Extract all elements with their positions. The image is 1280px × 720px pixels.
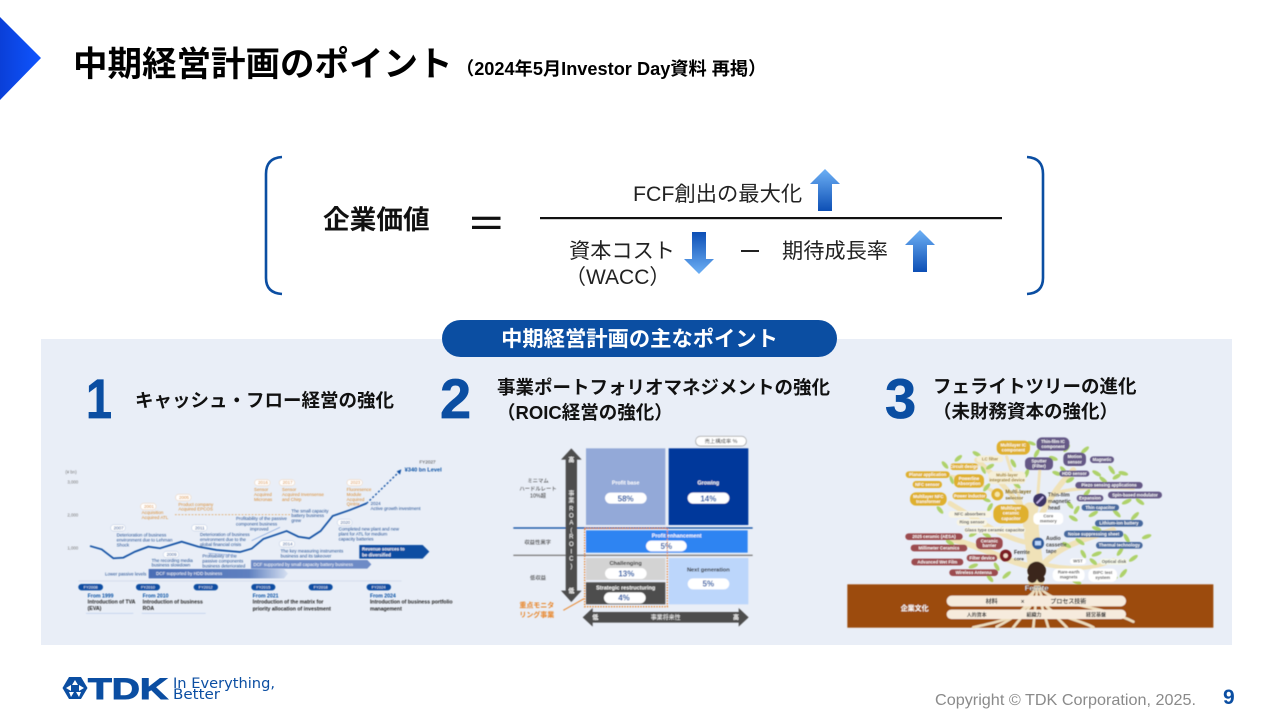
red technology pills: 2025 ceramic (AESA) — [912, 534, 956, 539]
soil band: corporate culture: 人的資本 — [967, 611, 987, 618]
purple technology pills: sensor — [1068, 459, 1082, 464]
management milestones: ROA — [143, 606, 154, 612]
management milestones: priority allocation of investment — [253, 606, 331, 612]
node: ferrite core: core — [1014, 557, 1024, 562]
point 3 heading — [885, 367, 1137, 430]
tree trunk and branches — [940, 457, 1133, 587]
panel: key points background — [41, 339, 1232, 645]
cell: Strategic restructuring — [586, 582, 665, 604]
management milestones: Introduction of business — [143, 600, 203, 606]
soil band: corporate culture: 経営基盤 — [1086, 611, 1106, 618]
blue event notes: 2014 — [283, 541, 293, 546]
subtitle: （2024年5月Investor Day資料 再掲） — [456, 58, 766, 79]
legend pill — [696, 436, 746, 446]
vertical ROA axis arrow: 高 — [568, 456, 574, 464]
orange acquisition notes: Acquired EPCOS — [178, 507, 213, 512]
point 2 heading — [440, 367, 831, 430]
node: audio cassette tape: tape — [1046, 549, 1057, 555]
management milestones: Introduction of business portfolio — [370, 600, 452, 606]
vertical ROA axis arrow: C — [569, 557, 574, 563]
revenue line — [90, 503, 367, 558]
cream technology pills: Core — [1043, 513, 1054, 518]
orange acquisition notes: Acquisition — [142, 510, 164, 515]
blue event notes: Deterioration of business — [117, 533, 167, 538]
focus monitoring label: 重点モニタ — [519, 601, 554, 610]
page number: 9 — [1223, 686, 1235, 709]
vertical ROA axis arrow: A — [569, 521, 573, 527]
orange acquisition notes: 2017 — [283, 480, 293, 485]
yellow technology pills: transformer — [916, 499, 941, 504]
point 3 heading: フェライトツリーの進化 — [933, 376, 1137, 397]
orange acquisition notes: Acquired — [347, 497, 365, 502]
vertical ROA axis arrow: O — [569, 542, 574, 548]
cell: Growing: Growing — [698, 481, 719, 487]
TDK logo — [62, 673, 275, 706]
minus sign — [741, 250, 759, 252]
blue event notes: Lower passive levels — [105, 572, 147, 577]
vertical ROA axis arrow: 業 — [568, 497, 574, 505]
axis labels — [65, 470, 79, 551]
management milestones: (EVA) — [88, 606, 102, 612]
CCC arrow: HDD: DCF supported by HDD business — [156, 571, 223, 576]
cell: Profit base: 58% — [618, 494, 634, 503]
fiscal year pills: FY2024 — [372, 585, 386, 590]
blue technology pills: Thermal technology — [1099, 543, 1140, 548]
node: thin-film magnetic head: magnetic — [1048, 499, 1071, 505]
row labels: 低収益 — [530, 574, 547, 582]
CCC arrow: rechargeable — [251, 560, 371, 569]
horizontal future axis arrow: 低 — [592, 614, 598, 622]
cream technology pills: memory — [1040, 518, 1057, 523]
blue event notes: Profitability of the — [202, 554, 237, 559]
leaves — [935, 440, 1152, 586]
row labels: 10%超 — [530, 492, 547, 500]
row labels: ハードルレート — [519, 486, 557, 492]
logo tagline: Better — [173, 687, 220, 703]
node: ferrite core — [1000, 550, 1030, 562]
blue event notes: 2011 — [195, 525, 205, 530]
purple technology pills: component — [1041, 444, 1065, 449]
numerator text: FCF創出の最大化 — [633, 182, 802, 206]
soil band: corporate culture — [847, 584, 1213, 628]
red technology pills: barrier — [982, 543, 997, 548]
focus monitoring label — [519, 599, 584, 619]
horizontal future axis arrow — [583, 608, 749, 627]
cream technology pills: Glass type ceramic capacitor — [965, 528, 1025, 533]
orange acquisition notes: Fluoresence — [347, 487, 372, 492]
red technology pills — [905, 533, 1003, 576]
yellow technology pills: capacitor — [1001, 516, 1021, 521]
management milestones: From 1999 — [88, 593, 114, 599]
red technology pills: Ceramic — [981, 538, 998, 543]
orange acquisition notes: and Chirp — [282, 497, 302, 502]
orange acquisition notes: 2023 — [350, 480, 361, 485]
vertical ROA axis arrow: O — [569, 513, 574, 519]
soil band: corporate culture: Ferrite — [1025, 584, 1049, 593]
key points heading pill: 中期経営計画の主なポイント — [501, 327, 778, 351]
horizontal future axis arrow: 高 — [733, 614, 739, 622]
logo tagline: In Everything, — [173, 676, 275, 692]
arrow down: WACC — [684, 232, 714, 274]
fraction line — [540, 217, 1002, 219]
roots — [957, 587, 1133, 627]
purple technology pills: Thin-film IC — [1041, 439, 1065, 444]
blue event notes: global financial crisis — [200, 542, 242, 547]
corner triangle marker — [0, 17, 41, 100]
legend pill: 売上構成率 % — [705, 437, 738, 445]
cell: Growing — [669, 448, 748, 525]
blue event notes: Profitability of the passive — [236, 516, 287, 521]
soil band: corporate culture: × — [1021, 599, 1025, 605]
purple technology pills: HDD sensor — [1062, 471, 1087, 476]
focus monitoring label: リング事業 — [519, 610, 554, 619]
fiscal year pills — [78, 584, 391, 590]
red technology pills: Millimeter Ceramics — [919, 545, 960, 550]
right bracket — [1027, 157, 1043, 294]
cell: Challenging: Challenging — [609, 561, 642, 567]
cell: Strategic restructuring: Strategic restructuring — [596, 585, 655, 591]
node: thin-film magnetic head: Thin-film — [1048, 493, 1070, 499]
blue event notes: 2007 — [114, 525, 124, 530]
management milestones: Introduction of the matrix for — [253, 600, 323, 606]
cream technology pills — [948, 511, 1128, 582]
yellow technology pills: NFC sensor — [915, 482, 940, 487]
yellow technology pills: Powerline — [959, 476, 980, 481]
formula panel — [266, 157, 1043, 294]
logo tagline — [173, 676, 275, 703]
vertical ROA axis arrow: 事 — [568, 489, 574, 497]
axis labels: 2,000 — [67, 513, 79, 518]
blue event notes: The small capacity — [291, 508, 329, 513]
point 2 heading: 2 — [440, 367, 471, 430]
blue technology pills: Noise suppressing sheet — [1068, 531, 1120, 536]
point 1 heading: 1 — [86, 367, 112, 430]
orange acquisition notes: 2016 — [258, 480, 268, 485]
dotted forecast — [367, 473, 398, 503]
yellow technology pills: Power inductor — [954, 493, 986, 498]
fiscal year pills: FY2008 — [84, 585, 98, 590]
vertical ROA axis arrow: 低 — [568, 587, 574, 595]
red technology pills: Filter device — [969, 555, 995, 560]
vertical ROA axis arrow: I — [570, 549, 572, 555]
management milestones: From 2024 — [370, 593, 396, 599]
purple technology pills: Piezo sensing applications — [1081, 483, 1137, 488]
yellow technology pills: Absorption — [957, 481, 981, 486]
blue event notes: The recording media — [152, 558, 193, 563]
orange acquisition notes — [141, 480, 372, 520]
row labels — [519, 478, 557, 582]
orange acquisition notes: 2005 — [179, 495, 189, 500]
cost of capital text: 資本コスト — [569, 239, 675, 263]
purple technology pills: Magnetic — [1093, 457, 1112, 462]
blue event notes: Deterioration of business — [200, 532, 250, 537]
CCC arrow: rechargeable: DCF supported by small capacity battery business — [253, 562, 354, 567]
blue event notes: capacity batteries — [339, 536, 374, 541]
blue event notes: 2009 — [167, 552, 177, 557]
title: 中期経営計画のポイント — [73, 46, 452, 84]
orange acquisition notes: Module — [347, 492, 362, 497]
CCC arrow: HDD — [149, 569, 288, 578]
axis labels: 1,000 — [67, 546, 79, 551]
yellow technology pills: component — [1002, 448, 1026, 453]
node: thin-film magnetic head: head — [1048, 505, 1060, 511]
red technology pills: Advanced Wet Film — [917, 559, 957, 564]
node: audio cassette tape: cassette — [1046, 542, 1067, 548]
orange acquisition notes: Acquired ATL — [142, 515, 169, 520]
forecast label: FY2027 — [419, 459, 436, 464]
blue event notes: 2024 — [371, 501, 381, 506]
cell: Profit base: Profit base — [612, 481, 639, 487]
blue technology pills: Thin capacitor — [1086, 505, 1115, 510]
blue event notes: environment due to Lehman — [117, 538, 173, 543]
cream technology pills: Ring sensor — [959, 520, 985, 525]
node: multilayer selector: Multi-layer — [1005, 489, 1031, 495]
logo wordmark: TDK — [88, 673, 168, 706]
orange acquisition notes: Product company — [178, 502, 214, 507]
copyright: Copyright © TDK Corporation, 2025. — [935, 692, 1196, 709]
enterprise value label: 企業価値 — [323, 205, 430, 235]
management milestones: Introduction of TVA — [88, 600, 136, 606]
orange acquisition notes: 2001 — [144, 504, 154, 509]
soil band: corporate culture: プロセス技術 — [1050, 597, 1086, 605]
cream technology pills: system — [1095, 575, 1110, 580]
cream technology pills: BIPC test — [1093, 570, 1113, 575]
revenue diversified arrow — [359, 545, 429, 559]
blue event notes: 2020 — [340, 520, 351, 525]
node: audio cassette tape — [1032, 536, 1067, 555]
yellow technology pills: Circuit design — [950, 464, 979, 469]
fiscal year pills: FY2012 — [199, 585, 213, 590]
yellow technology pills: LC filter — [982, 456, 998, 461]
point 1 heading — [86, 367, 395, 430]
purple technology pills: Sputter — [1031, 458, 1047, 463]
chart: ferrite tree — [847, 437, 1213, 628]
purple technology pills — [1025, 437, 1162, 501]
yellow technology pills: Multilayer IC — [1000, 443, 1026, 448]
ferrite rock at tree base — [1027, 562, 1046, 583]
node: audio cassette tape: Audio — [1046, 536, 1061, 542]
axis labels: (¥ bn) — [65, 470, 77, 475]
arrow up: FCF — [810, 169, 840, 211]
point 3 heading: （未財務資本の強化） — [933, 401, 1118, 422]
vertical ROA axis arrow: ) — [570, 564, 572, 570]
purple technology pills: (Filter) — [1032, 463, 1046, 468]
focus monitoring dotted frame — [585, 528, 667, 607]
blue event notes: improved — [250, 527, 269, 532]
soil band: corporate culture: 組織力 — [1027, 611, 1041, 618]
axis labels: 3,000 — [67, 480, 79, 485]
blue technology pills — [1064, 504, 1143, 549]
red technology pills: Wireless Antenna — [956, 570, 992, 575]
yellow technology pills: Multi-layer — [996, 472, 1018, 477]
yellow technology pills — [906, 441, 1030, 523]
chart: business portfolio matrix — [513, 436, 753, 627]
cell: Profit enhancement — [586, 530, 748, 553]
blue event notes: business slowdown — [152, 563, 191, 568]
cell: Strategic restructuring: 4% — [618, 594, 630, 603]
orange acquisition notes: Micronas — [254, 497, 273, 502]
blue event notes: Completed new plant and new — [339, 526, 400, 531]
revenue diversified arrow: Revenue sources to — [362, 547, 405, 552]
blue event notes: business and its takeover — [281, 554, 332, 559]
blue event notes: plant for ATL for medium — [339, 531, 388, 536]
point 3 heading: 3 — [885, 367, 916, 430]
yellow technology pills: ceramic — [1003, 510, 1020, 515]
vertical ROA axis arrow: R — [569, 535, 574, 541]
horizontal future axis arrow: 事業将来性 — [651, 614, 681, 622]
key points heading pill — [442, 320, 837, 357]
fiscal year pills: FY2010 — [141, 585, 156, 590]
blue event notes: grew — [291, 518, 302, 523]
yellow technology pills: integrated device — [989, 478, 1025, 483]
cell: Challenging — [586, 558, 665, 580]
orange acquisition notes: Sensor — [254, 487, 269, 492]
orange acquisition notes: Qintrix — [347, 502, 360, 507]
left bracket — [266, 157, 282, 294]
management milestones: management — [370, 607, 402, 613]
forecast label — [405, 459, 442, 473]
cell: Next generation — [669, 558, 748, 604]
vertical ROA axis arrow — [561, 448, 582, 602]
purple technology pills: Spin-based modulator — [1112, 492, 1158, 497]
blue event notes — [105, 501, 421, 577]
revenue diversified arrow: be diversified — [362, 553, 391, 558]
cell: Challenging: 13% — [618, 569, 634, 578]
soil band: corporate culture: 材料 — [986, 597, 998, 605]
management milestones — [86, 593, 452, 613]
vertical ROA axis arrow: R — [569, 506, 574, 512]
WACC text: （WACC） — [565, 266, 670, 289]
cell: Next generation: 5% — [703, 580, 714, 589]
point 2 heading: 事業ポートフォリオマネジメントの強化 — [497, 377, 831, 398]
vertical ROA axis arrow: ( — [570, 528, 572, 534]
row labels: 収益性黒字 — [524, 538, 551, 546]
cream technology pills: Rare-earth — [1058, 569, 1080, 574]
fiscal year pills: FY2018 — [314, 585, 328, 590]
cell: Next generation: Next generation — [687, 567, 730, 573]
blue event notes: battery business — [291, 513, 325, 518]
icon: TDK emblem — [62, 677, 88, 699]
arrow up: growth — [905, 230, 935, 272]
point 1 heading: キャッシュ・フロー経営の強化 — [135, 390, 395, 411]
yellow technology pills: Planar application — [909, 472, 947, 477]
cream technology pills: NFC absorbers — [954, 512, 986, 517]
management milestones: From 2021 — [253, 593, 279, 599]
blue event notes: Shock — [117, 543, 130, 548]
cream technology pills: WST — [1073, 559, 1083, 564]
node: thin-film magnetic head — [1033, 493, 1071, 511]
yellow technology pills: Multilayer — [1001, 505, 1021, 510]
orange acquisition notes: Acquired Invensense — [282, 492, 324, 497]
node: ferrite core: Ferrite — [1014, 550, 1030, 556]
blue event notes: Active growth investment — [371, 506, 421, 511]
management milestones: From 2010 — [143, 593, 169, 599]
forecast label: ¥340 bn Level — [405, 467, 442, 473]
fiscal year pills: FY2015 — [256, 585, 271, 590]
expected growth text: 期待成長率 — [782, 239, 888, 263]
cream technology pills: magnets — [1060, 575, 1078, 580]
cell: Profit enhancement: 5% — [661, 542, 672, 551]
blue event notes: The key measuring instruments — [281, 549, 344, 554]
yellow technology pills: Multilayer NFC — [913, 494, 943, 499]
cream technology pills: Optical disk — [1102, 559, 1127, 564]
node: multilayer selector — [991, 488, 1031, 500]
blue event notes: passive components — [202, 559, 244, 564]
cell: Profit base — [586, 448, 665, 525]
cell: Profit enhancement: Profit enhancement — [652, 533, 702, 539]
purple technology pills: Motion — [1068, 454, 1082, 459]
equals sign — [472, 217, 500, 229]
chart: cash flow management history — [65, 459, 452, 613]
blue event notes: environment due to the — [200, 537, 246, 542]
forecast arrow head — [397, 469, 401, 475]
cell: Growing: 14% — [700, 494, 716, 503]
orange acquisition notes: Sensor — [282, 487, 297, 492]
point 2 heading: （ROIC経営の強化） — [497, 402, 673, 423]
blue technology pills: Lithium-ion battery — [1099, 521, 1139, 526]
node: multilayer selector: selector — [1005, 495, 1023, 500]
soil band: corporate culture: 企業文化 — [901, 603, 929, 612]
purple technology pills: Expansion — [1079, 496, 1101, 501]
threshold lines — [513, 527, 753, 529]
blue event notes: business deteriorated — [202, 563, 246, 568]
orange acquisition notes: Acquired — [254, 492, 272, 497]
row labels: ミニマム — [527, 478, 549, 485]
blue event notes: component business — [236, 521, 278, 526]
